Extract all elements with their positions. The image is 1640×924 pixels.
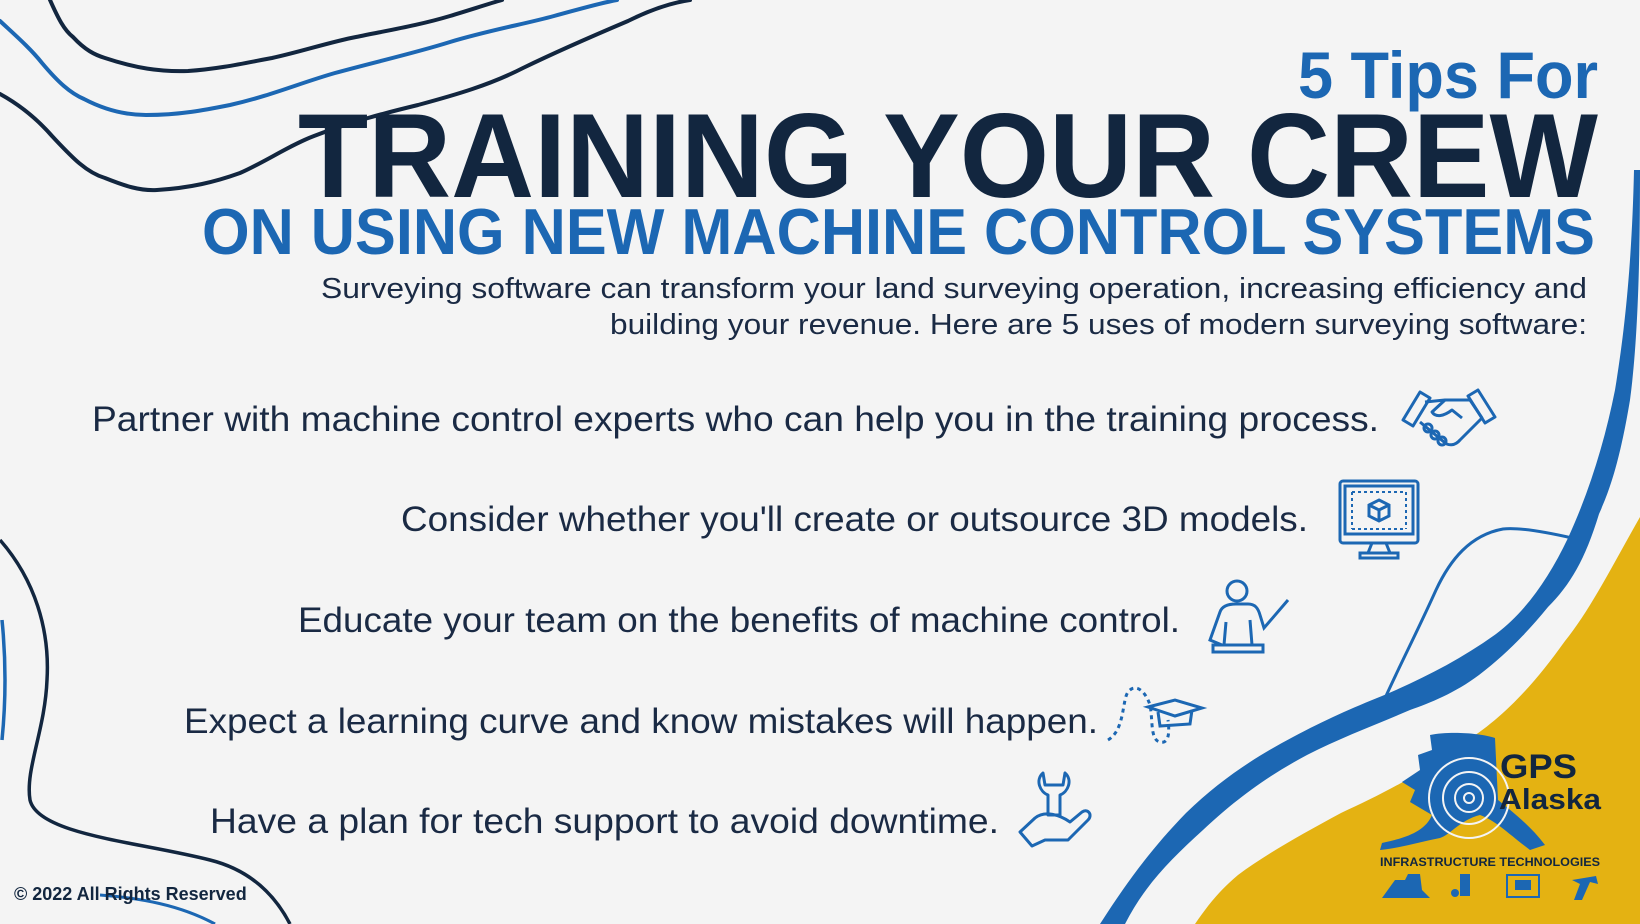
logo text: GPS [1500,748,1577,786]
logo icons [1382,874,1598,900]
icon: teacher [1210,581,1288,652]
decorative lines bottom-left [0,540,290,924]
icon: monitor 3D model [1340,481,1418,558]
intro text: building your revenue. Here are 5 uses of modern surveying software: [610,309,1587,341]
logo: GPS Alaska: Alaska [1499,784,1602,816]
icon: hand wrench [1020,773,1090,846]
blue band [1100,170,1640,924]
tip 5: Have a plan for tech support to avoid downtime. [210,802,999,841]
tip 1: Partner with machine control experts who can help you in the training process. [92,400,1379,439]
tips list [92,400,1379,841]
decorative lines top-left [0,0,690,190]
intro text [321,273,1587,341]
intro text: Surveying software can transform your land surveying operation, increasing efficiency and [321,273,1587,305]
title: TRAINING YOUR CREW: TRAINING YOUR CREW [298,89,1599,223]
copyright: © 2022 All Rights Reserved [14,884,247,904]
thin blue curve [1386,529,1572,696]
logo: GPS Alaska: INFRASTRUCTURE TECHNOLOGIES [1380,855,1600,869]
title: 5 Tips For: 5 Tips For [1298,38,1598,112]
tip 3: Educate your team on the benefits of machine control. [298,601,1180,640]
logo: GPS Alaska [1380,733,1602,900]
yellow corner [1195,517,1640,924]
icon: graduation path [1108,688,1202,742]
title: subtitle: ON USING NEW MACHINE CONTROL SYSTEMS [202,195,1595,268]
logo map [1380,733,1545,850]
icon: handshake [1403,390,1495,445]
tip 4: Expect a learning curve and know mistakes will happen. [184,702,1098,741]
tip 2: Consider whether you'll create or outsource 3D models. [401,500,1308,539]
